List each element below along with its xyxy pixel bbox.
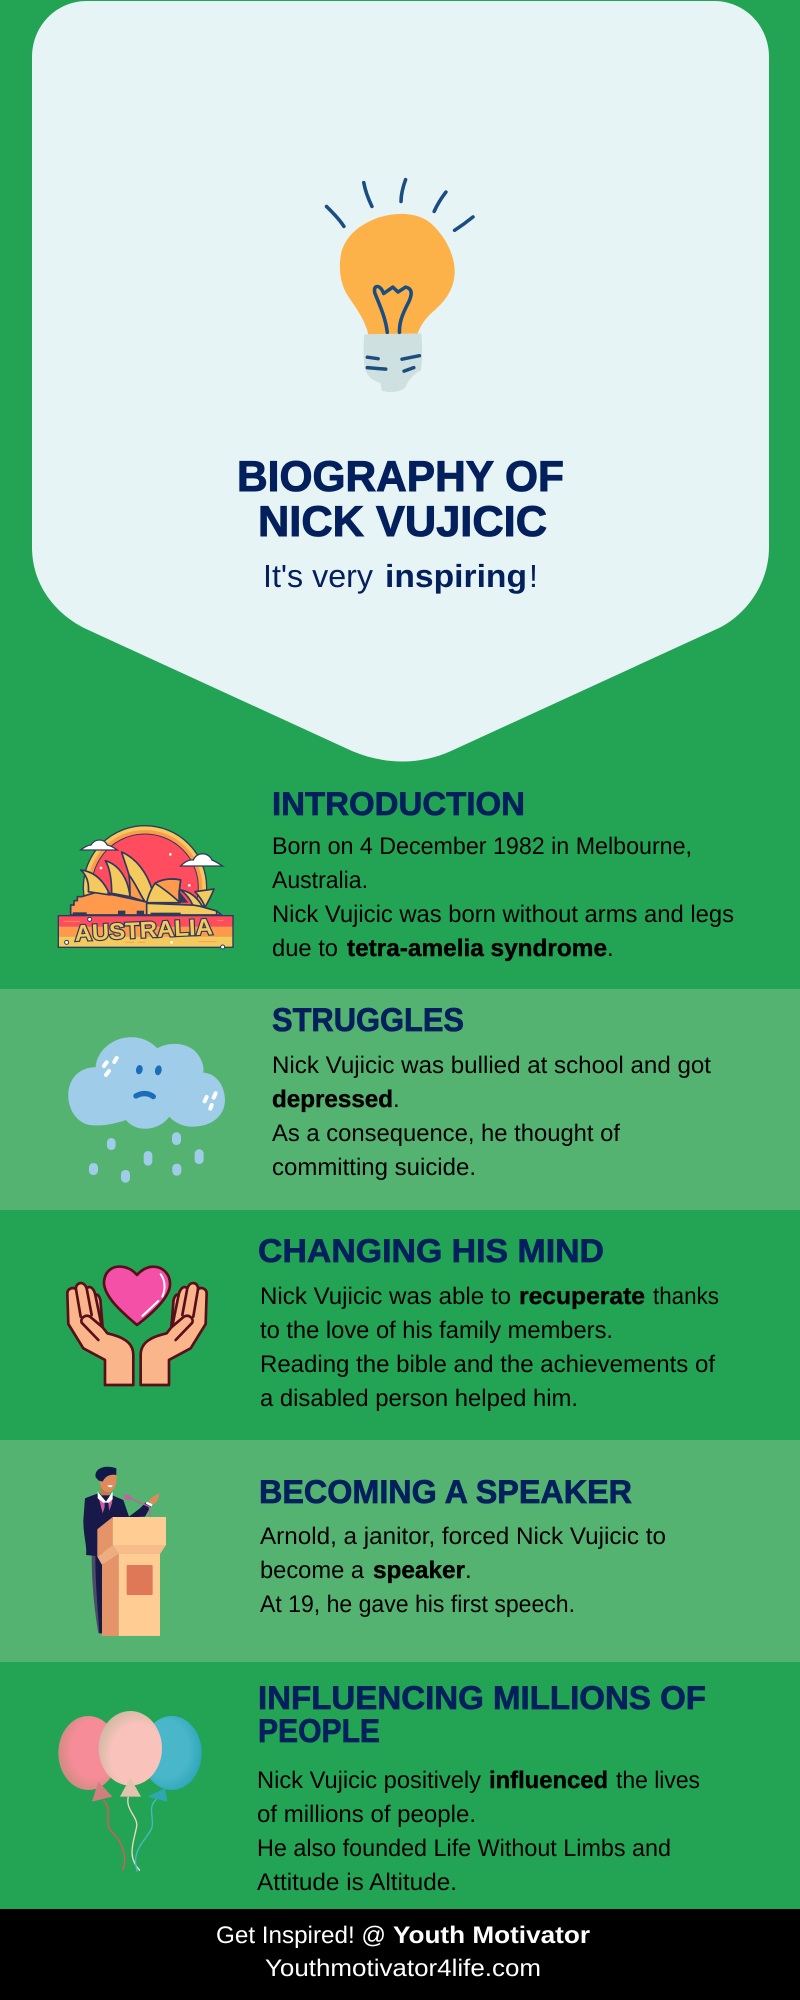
text block: introduction: INTRODUCTION: [272, 785, 525, 822]
text block: struggles: committing suicide.: [272, 1154, 476, 1181]
icon: Australia badge: AUSTRALIA: [74, 914, 213, 946]
text block: changing his mind: Nick Vujicic was able to: [260, 1283, 511, 1310]
text block: influencing millions of people: PEOPLE: [258, 1712, 380, 1749]
text block: changing his mind: a disabled person helped him.: [260, 1385, 578, 1412]
footer: [0, 1909, 800, 2000]
text block: introduction: [272, 785, 734, 962]
footer: Youth Motivator: [393, 1922, 590, 1949]
text block: changing his mind: thanks: [653, 1283, 719, 1310]
text block: struggles: [272, 1001, 711, 1181]
text block: changing his mind: [258, 1232, 719, 1412]
text block: struggles: depressed: [272, 1086, 393, 1113]
text block: influencing millions of people: INFLUENCING MILLIONS OF: [258, 1679, 706, 1716]
text block: struggles: .: [393, 1086, 400, 1113]
text block: introduction: tetra-amelia syndrome: [347, 935, 607, 962]
text block: influencing millions of people: of millions of people.: [257, 1801, 476, 1828]
text block: introduction: Born on 4 December 1982 in Melbourne,: [272, 833, 692, 860]
footer: Youthmotivator4life.com: [265, 1955, 541, 1982]
icon: Australia badge: [58, 826, 233, 949]
text block: influencing millions of people: Attitude is Altitude.: [257, 1869, 457, 1896]
text block: struggles: STRUGGLES: [272, 1001, 464, 1038]
text block: becoming a speaker: speaker: [373, 1557, 465, 1584]
title: [237, 453, 564, 546]
text block: becoming a speaker: Arnold, a janitor, forced Nick Vujicic to: [260, 1523, 666, 1550]
text block: changing his mind: CHANGING HIS MIND: [258, 1232, 604, 1269]
text block: changing his mind: to the love of his family members.: [260, 1317, 613, 1344]
icon: speaker at podium: [83, 1467, 166, 1636]
text block: introduction: due to: [272, 935, 338, 962]
subtitle: [263, 558, 538, 594]
title: BIOGRAPHY OF: [237, 453, 564, 501]
text block: introduction: Australia.: [272, 867, 368, 894]
subtitle: It's very: [263, 558, 373, 594]
footer: Get Inspired! @: [216, 1922, 386, 1949]
text block: introduction: Nick Vujicic was born without arms and legs: [272, 901, 734, 928]
text block: influencing millions of people: Nick Vujicic positively: [257, 1767, 481, 1794]
text block: becoming a speaker: BECOMING A SPEAKER: [259, 1473, 632, 1510]
subtitle: inspiring: [385, 558, 527, 594]
text block: influencing millions of people: [257, 1679, 706, 1896]
icon: hands holding heart: [67, 1267, 207, 1385]
text block: struggles: Nick Vujicic was bullied at school and got: [272, 1052, 711, 1079]
icon: three balloons: [58, 1711, 202, 1872]
text block: influencing millions of people: the lives: [616, 1767, 700, 1794]
text block: struggles: As a consequence, he thought of: [272, 1120, 620, 1147]
text block: becoming a speaker: At 19, he gave his first speech.: [260, 1591, 575, 1618]
text block: introduction: .: [607, 935, 614, 962]
text block: influencing millions of people: influenced: [489, 1767, 608, 1794]
text block: influencing millions of people: He also founded Life Without Limbs and: [257, 1835, 671, 1862]
text block: changing his mind: Reading the bible and the achievements of: [260, 1351, 715, 1378]
icon: light bulb: [327, 180, 473, 392]
text block: becoming a speaker: become a: [260, 1557, 365, 1584]
text block: becoming a speaker: .: [465, 1557, 472, 1584]
icon: sad rain cloud: [68, 1037, 225, 1183]
panel: header shield: [32, 1, 769, 762]
title: NICK VUJICIC: [258, 498, 547, 546]
text block: changing his mind: recuperate: [519, 1283, 645, 1310]
text block: becoming a speaker: [259, 1473, 666, 1618]
subtitle: !: [529, 558, 538, 594]
